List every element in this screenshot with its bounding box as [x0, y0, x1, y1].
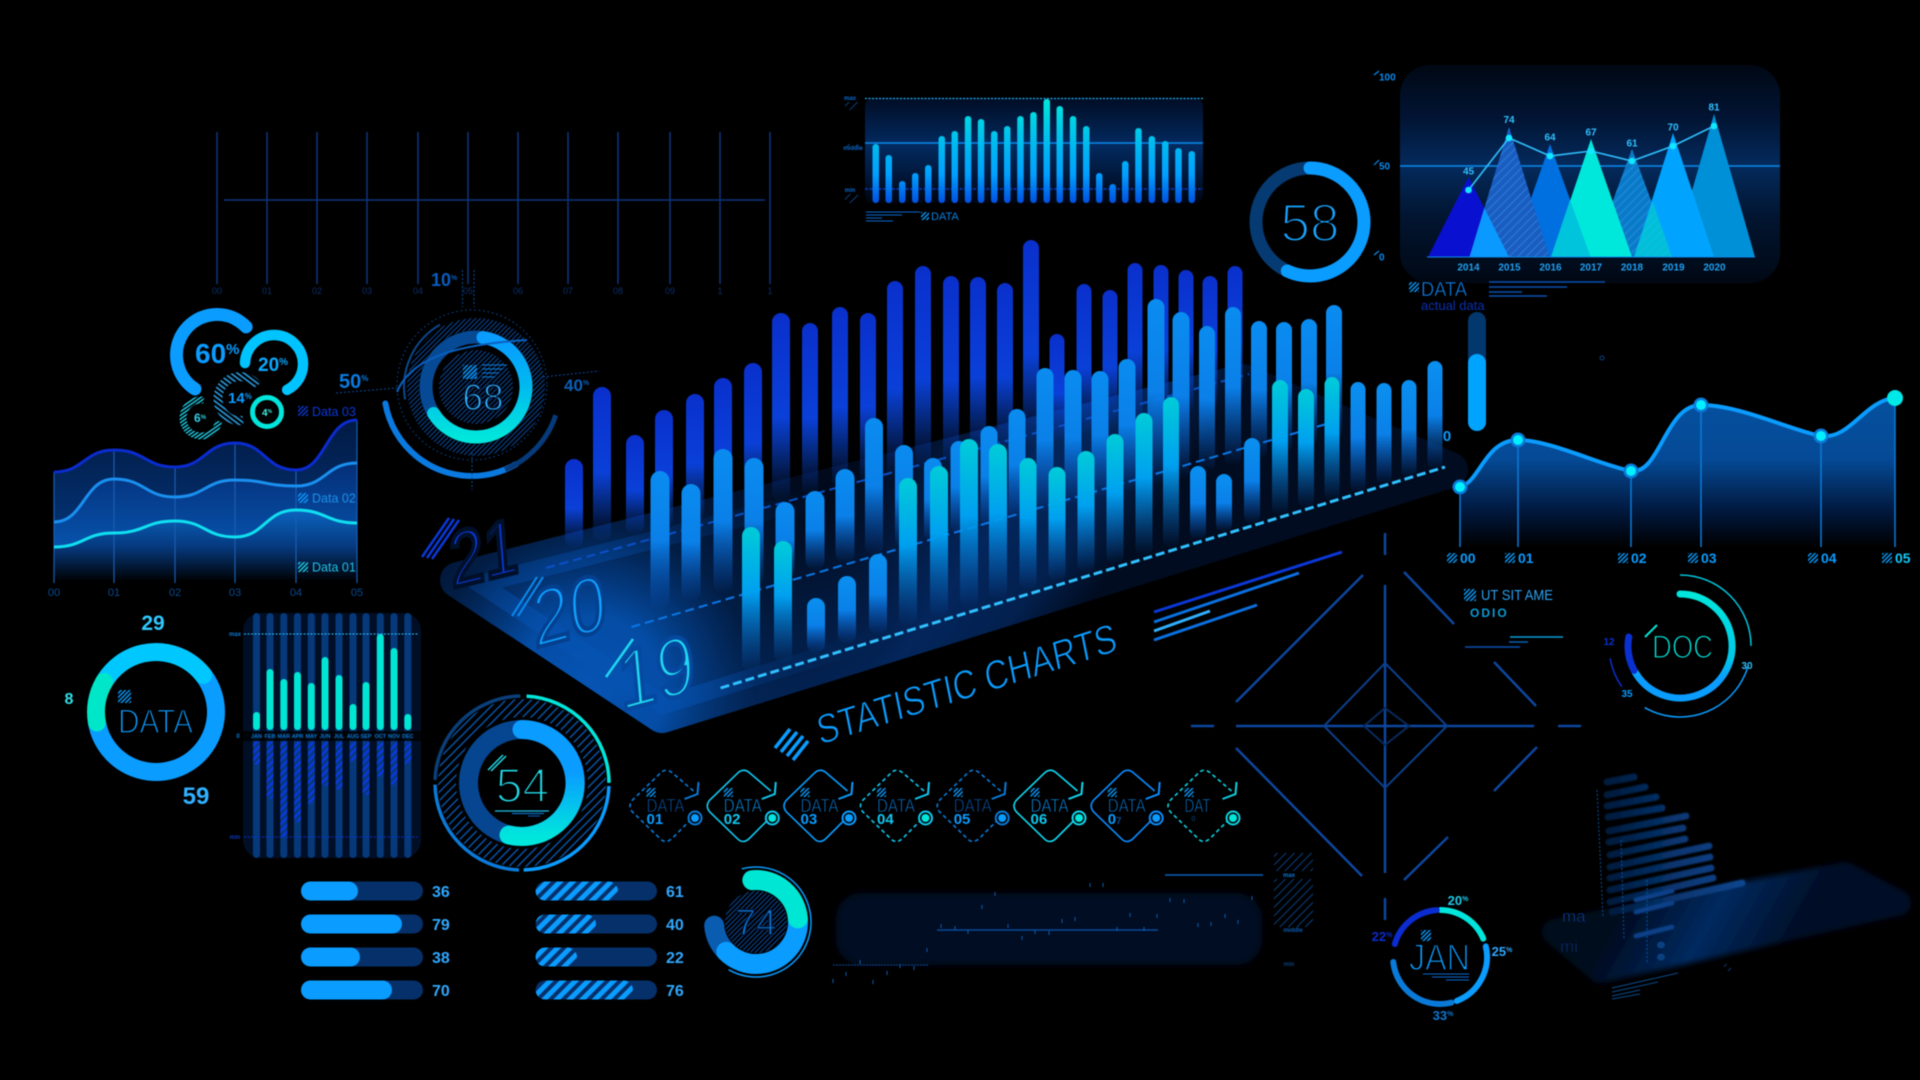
node: data 01: 01: [646, 811, 663, 828]
month bar chart: max: [229, 632, 242, 638]
gauge cluster: percentages: [161, 299, 304, 439]
gauge: 68: %: [361, 374, 368, 383]
node: data 06: [1014, 770, 1086, 842]
donut: DATA: 29: [141, 612, 165, 635]
gauge: 68: 40: [564, 376, 583, 395]
faded isometric horizontal bar chart: mi: [1560, 937, 1578, 956]
bar row: back (2021): [565, 240, 1242, 548]
gauge: JAN: 20: [1448, 893, 1462, 908]
bar chart: top middle: min: [845, 188, 856, 194]
faded isometric horizontal bar chart: [1555, 777, 1898, 999]
dashed axis: middle row: [632, 420, 1340, 627]
grid chart: top left: [212, 132, 773, 296]
node: data 03: [784, 770, 856, 842]
month bar chart: OCT: [374, 734, 387, 740]
month bar chart: APR: [292, 734, 303, 740]
month bar chart: 0: [236, 734, 240, 740]
grid chart: top left: 00: [212, 286, 222, 296]
triangle chart: top right: 2015: [1498, 262, 1521, 274]
data diamond nodes row: [630, 770, 1240, 842]
gauge: JAN: 25: [1492, 944, 1506, 959]
grid chart: top left: 05: [463, 286, 473, 296]
arc: 20 percent: [244, 334, 304, 394]
wave area chart: left: 04: [290, 587, 302, 599]
donut gauge: 58: [1256, 168, 1364, 276]
gauge: DOC: [1581, 547, 1779, 745]
main isometric panel: [458, 382, 1450, 715]
donut: DATA: DATA: [118, 703, 193, 741]
grid chart: top left: 08: [613, 286, 623, 296]
gauge: 68: 10: [431, 270, 451, 290]
arc: 60 percent: 60: [195, 338, 226, 369]
wave area chart: left: 02: [169, 587, 181, 599]
progress bars: solid: 38: [432, 950, 450, 967]
gauge: JAN: %: [1386, 932, 1393, 939]
ring: 4 percent: [252, 398, 282, 426]
arc: 6 percent: 6: [194, 411, 201, 425]
month bar chart: JUL: [334, 734, 345, 740]
gauge: JAN: JAN: [1409, 937, 1470, 978]
node: data 01: DATA: [646, 796, 684, 816]
month bar chart: SEP: [360, 734, 372, 740]
wave area chart: left: 01: [108, 587, 120, 599]
gauge: 54: [431, 692, 613, 874]
triangle chart: top right: [1374, 65, 1780, 283]
zero label: 0: [1443, 428, 1451, 445]
gauge: 68: 50: [339, 371, 361, 393]
node: data 03: 03: [800, 811, 817, 828]
month bar chart: JUN: [319, 734, 331, 740]
node: data 06: DATA: [1030, 796, 1068, 816]
arc: 14 percent: [215, 374, 265, 423]
gauge: JAN: %: [1462, 896, 1469, 903]
month bar chart: JAN: [251, 734, 262, 740]
wide scatter panel: max: [1283, 873, 1296, 879]
month bar chart: [229, 613, 421, 858]
triangle chart: top right: 45: [1463, 166, 1474, 178]
month bar chart: min: [230, 835, 241, 841]
bar chart: top middle: DATA: [931, 211, 959, 223]
wave area chart: left: Data 02: [312, 492, 356, 506]
progress bars: hatched: 61: [666, 884, 684, 901]
triangle chart: top right: 81: [1708, 102, 1720, 114]
node: data 08 partial: [1168, 770, 1240, 842]
node: data 01: [630, 770, 702, 842]
text block: ut sit ame: UT SIT AME: [1481, 587, 1553, 604]
grid chart: top left: 1: [717, 286, 723, 296]
month bar chart: AUG: [347, 734, 359, 740]
grid chart: top left: 1: [767, 286, 773, 296]
progress bars: hatched: 22: [666, 950, 684, 967]
month bar chart: DEC: [402, 734, 414, 740]
wide scatter panel: [832, 853, 1313, 984]
label: DATA actual data: [1409, 279, 1605, 313]
node: data 02: DATA: [724, 796, 762, 816]
gauge: DOC: 30: [1741, 661, 1753, 672]
arc: 6 percent: [180, 397, 222, 439]
donut: DATA: 8: [65, 691, 74, 708]
arc: 60 percent: %: [226, 341, 240, 358]
triangle chart: top right: 0: [1379, 252, 1385, 264]
arc: 60 percent: [161, 299, 273, 411]
progress bars: hatched: 76: [666, 983, 684, 1000]
progress bars: solid: 36: [432, 884, 450, 901]
donut gauge: 58: 58: [1281, 194, 1339, 253]
progress bars: hatched: 40: [666, 917, 684, 934]
node: data 04: 04: [877, 811, 894, 828]
node: data 05: 05: [954, 811, 970, 828]
year label: 19: 19: [614, 616, 698, 729]
ring: 4 percent: %: [268, 409, 273, 415]
gauge: JAN: 33: [1433, 1008, 1447, 1023]
progress bars: solid: 70: [432, 983, 450, 1000]
node: data 08 partial: 0: [1192, 816, 1196, 823]
gauge: DOC: 12: [1603, 637, 1615, 648]
gauge: 74: 74: [735, 902, 777, 943]
grid chart: top left: 02: [312, 286, 322, 296]
month bar chart: NOV: [388, 734, 400, 740]
wave area chart: left: 05: [351, 587, 363, 599]
arc: 20 percent: %: [279, 357, 288, 368]
progress bars: hatched: [536, 882, 684, 1000]
arc: 14 percent: %: [245, 392, 252, 401]
label: DATA actual data: DATA: [1421, 279, 1468, 301]
progress bars: solid: [301, 882, 450, 1000]
wave area chart: left: 03: [229, 587, 241, 599]
triangle chart: top right: 64: [1544, 132, 1556, 144]
gauge: JAN: %: [1447, 1011, 1454, 1018]
dashed axis: back row: [546, 374, 1249, 568]
area chart: right: [1447, 390, 1911, 566]
triangle chart: top right: 100: [1379, 72, 1396, 84]
grid chart: top left: 07: [563, 286, 573, 296]
wave area chart: left: Data 03: [312, 405, 356, 419]
wave area chart: left: 00: [48, 587, 60, 599]
triangle chart: top right: 67: [1585, 128, 1597, 138]
faded isometric horizontal bar chart: ma: [1562, 907, 1586, 926]
label: DATA actual data: actual data: [1421, 298, 1485, 313]
year label: 21: 21: [446, 502, 521, 606]
gauge: 54: 54: [496, 760, 549, 813]
triangle chart: top right: 2017: [1580, 262, 1603, 274]
triangle chart: top right: 2014: [1457, 262, 1480, 274]
node: data 02: 02: [724, 811, 740, 828]
month bar chart: FEB: [264, 734, 276, 740]
gauge: DOC: DOC: [1652, 629, 1713, 665]
triangle chart: top right: 70: [1667, 122, 1679, 134]
node: data 05: [937, 770, 1009, 842]
donut: DATA: 59: [183, 783, 209, 810]
month bar chart: MAY: [305, 734, 317, 740]
wave area chart: left: Data 01: [312, 560, 356, 574]
crosshair diamond decoration: [1191, 533, 1581, 920]
bar chart: top middle: max: [844, 96, 857, 102]
triangle chart: top right: 74: [1503, 115, 1515, 126]
gauge: JAN: %: [1506, 947, 1513, 954]
gauge: 68: %: [583, 380, 590, 387]
node: data 07: [1091, 770, 1163, 842]
bar row: middle (2020): [650, 299, 1342, 609]
year label: 20: 20: [529, 556, 609, 665]
gauge: 74: [689, 855, 823, 989]
grid chart: top left: 09: [665, 286, 675, 296]
area chart: right: 04: [1821, 550, 1837, 566]
text block: ut sit ame: ODIO: [1470, 606, 1509, 620]
bar row: front (2019): [742, 361, 1442, 672]
node: data 04: DATA: [877, 796, 915, 816]
area chart: right: 03: [1701, 550, 1717, 566]
decorative title lines: [1154, 552, 1342, 640]
wave area chart: left: [48, 405, 363, 599]
gauge: 68: [336, 268, 599, 508]
donut: DATA: [65, 612, 240, 810]
node: data 04: [860, 770, 932, 842]
bar chart: top middle: middle: [843, 146, 863, 152]
gauge: 68: 68: [462, 377, 504, 418]
triangle chart: top right: 2019: [1662, 262, 1685, 274]
wide scatter panel: min: [1284, 962, 1295, 968]
grid chart: top left: 06: [513, 286, 523, 296]
arc: 20 percent: 20: [258, 355, 279, 376]
wide scatter panel: middle: [1283, 928, 1303, 934]
triangle chart: top right: 2016: [1539, 262, 1562, 274]
bar chart: top middle: [843, 96, 1203, 223]
arc: 6 percent: %: [201, 415, 207, 421]
area chart: right: 01: [1518, 550, 1534, 566]
area chart: right: 00: [1460, 550, 1476, 566]
triangle chart: top right: 2018: [1621, 262, 1644, 274]
node: data 07: DATA: [1108, 796, 1146, 816]
node: data 06: 06: [1030, 811, 1047, 828]
progress bars: solid: 79: [432, 917, 450, 934]
gauge: DOC: 35: [1621, 689, 1633, 700]
area chart: right: 05: [1895, 550, 1911, 566]
gauge: JAN: [1372, 893, 1513, 1023]
grid chart: top left: 04: [413, 286, 423, 296]
vertical pill gauge: [1468, 312, 1604, 431]
grid chart: top left: 03: [362, 286, 372, 296]
text block: ut sit ame: [1464, 587, 1563, 647]
triangle chart: top right: 61: [1626, 138, 1638, 150]
dashed axis: front row: [721, 467, 1445, 688]
gauge: JAN: 22: [1372, 929, 1386, 944]
grid chart: top left: 01: [262, 286, 272, 296]
gauge: 68: %: [451, 275, 458, 282]
node: data 03: DATA: [800, 796, 838, 816]
area chart: right: 02: [1631, 550, 1647, 566]
node: data 08 partial: DAT: [1184, 796, 1210, 816]
triangle chart: top right: 2020: [1703, 262, 1726, 274]
arc: 14 percent: 14: [228, 390, 245, 407]
node: data 02: [707, 770, 779, 842]
triangle chart: top right: 50: [1379, 162, 1391, 172]
title: statistic charts: STATISTIC CHARTS: [813, 614, 1120, 754]
month bar chart: MAR: [278, 734, 290, 740]
node: data 05: DATA: [954, 796, 992, 816]
ring: 4 percent: 4: [262, 408, 268, 419]
node: data 07: 07: [1108, 811, 1122, 828]
